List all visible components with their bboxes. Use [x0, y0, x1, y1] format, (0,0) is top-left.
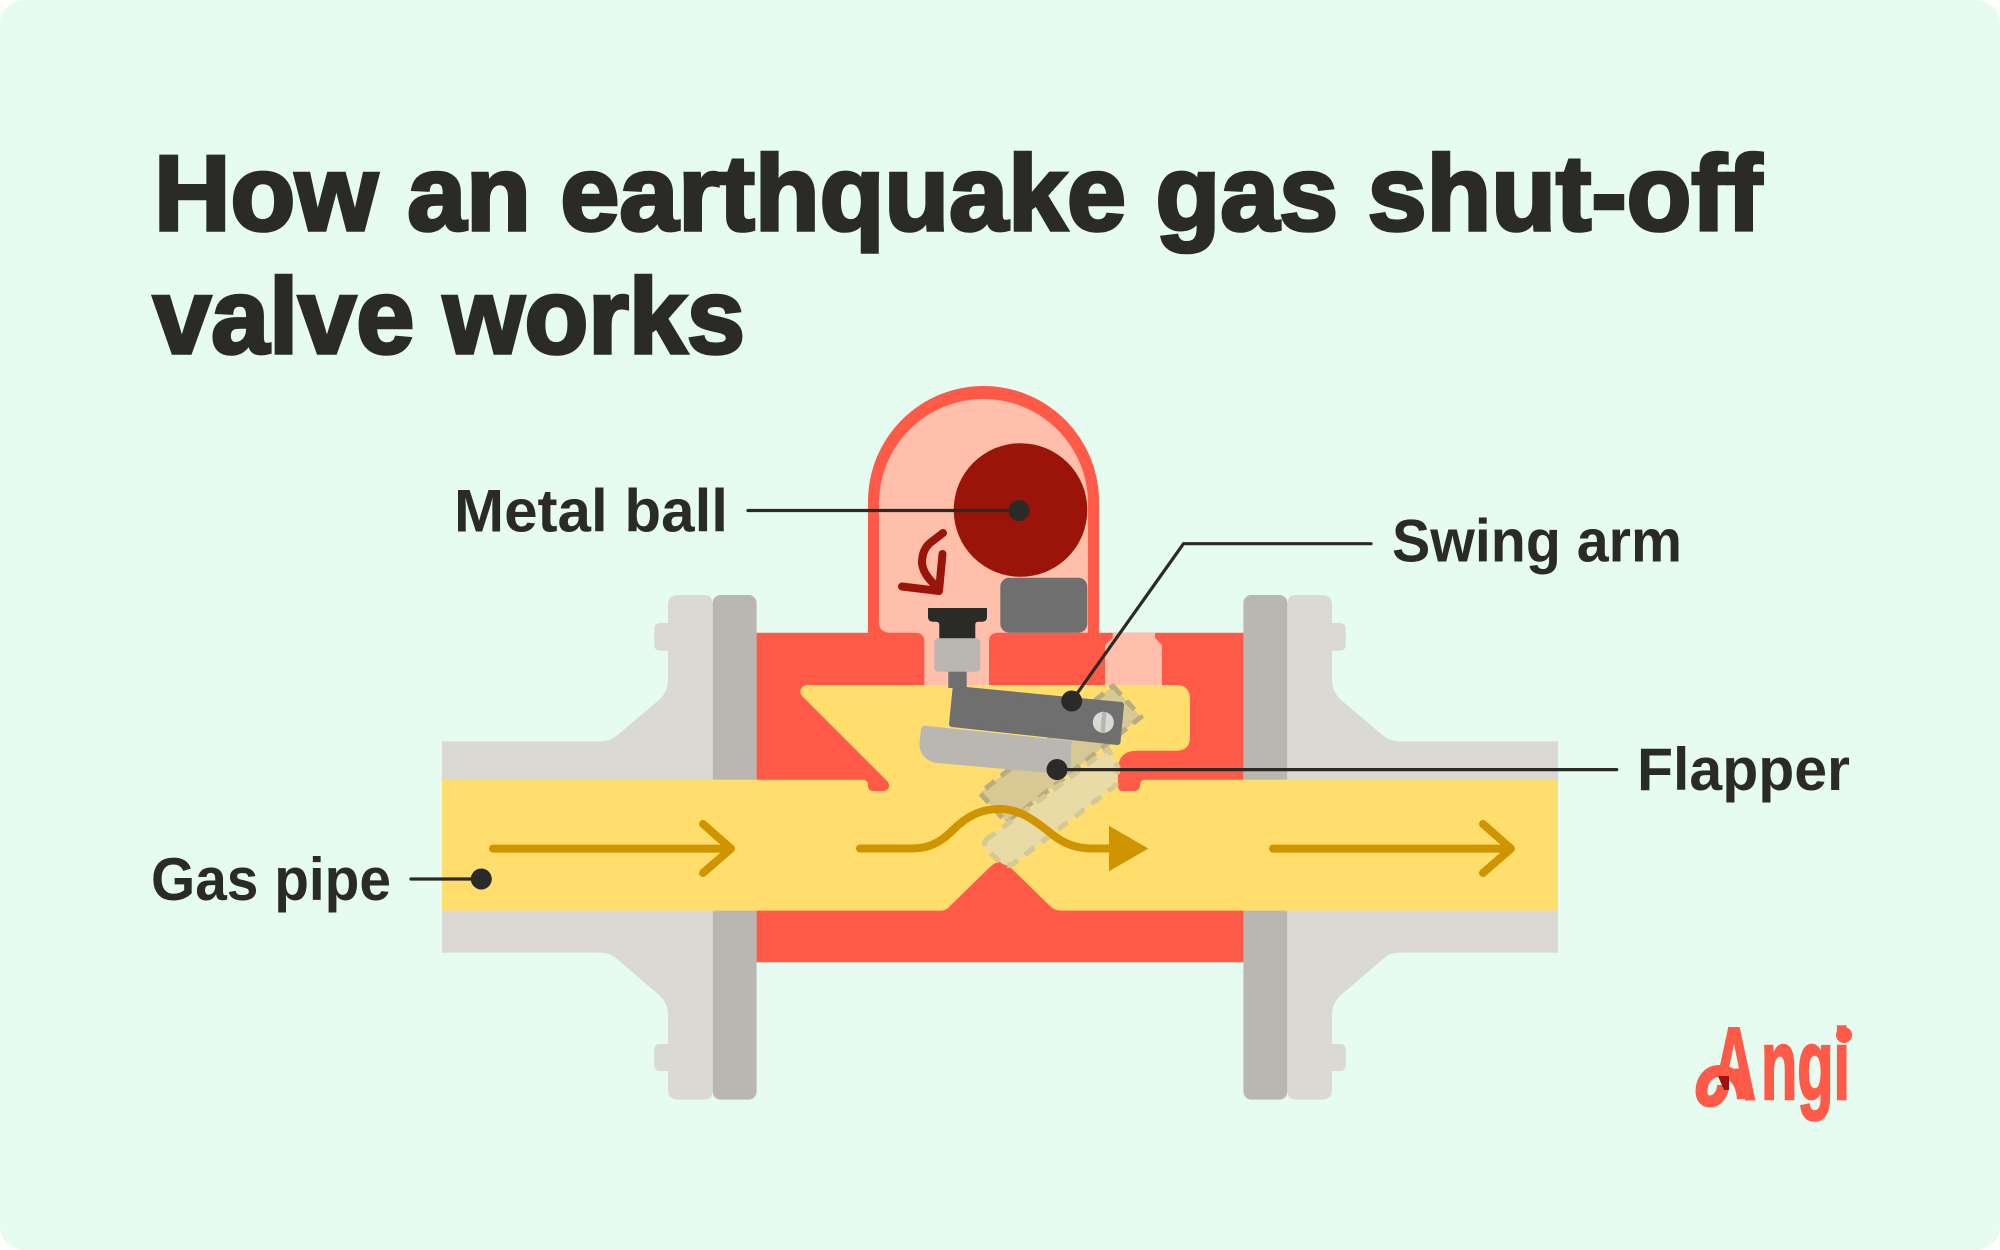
- side port: [1105, 633, 1162, 690]
- title: [153, 133, 1762, 376]
- label: Swing arm: Swing arm: [1392, 508, 1682, 575]
- logo: Angi: [1696, 1025, 1852, 1122]
- label: Swing arm: [1061, 508, 1682, 712]
- title: valve works: [153, 256, 745, 376]
- label: Gas pipe: Gas pipe: [151, 846, 391, 913]
- valve diagram: [442, 386, 1558, 1100]
- flapper: [919, 726, 1072, 775]
- title: How an earthquake gas shut-off: [154, 133, 1762, 253]
- label: Flapper: Flapper: [1637, 736, 1850, 803]
- metal ball: [954, 443, 1087, 577]
- open position ghost: flapper: [985, 749, 1118, 865]
- open position ghost: swing arm: [980, 686, 1141, 823]
- rest block: [1000, 578, 1087, 633]
- ball chamber: [879, 399, 1088, 690]
- gas flow arrow: left: [493, 824, 731, 873]
- swing arm: [952, 689, 1121, 742]
- label: Metal ball: Metal ball: [454, 478, 728, 545]
- gas flow arrow: right: [1273, 824, 1511, 873]
- right pipe flange: [1243, 595, 1558, 1100]
- left pipe flange: [442, 595, 757, 1100]
- label: Metal ball: [454, 478, 1030, 545]
- label: Flapper: [1046, 736, 1850, 803]
- gas flow arrow: through valve: [860, 809, 1148, 871]
- logo: Angi: A: [1712, 1006, 1756, 1121]
- logo: Angi: ngi: [1761, 1009, 1850, 1121]
- gas passage: [442, 685, 1558, 911]
- plunger: [928, 608, 987, 688]
- valve body: [757, 386, 1243, 962]
- icon: rolling direction arrow: [902, 533, 943, 591]
